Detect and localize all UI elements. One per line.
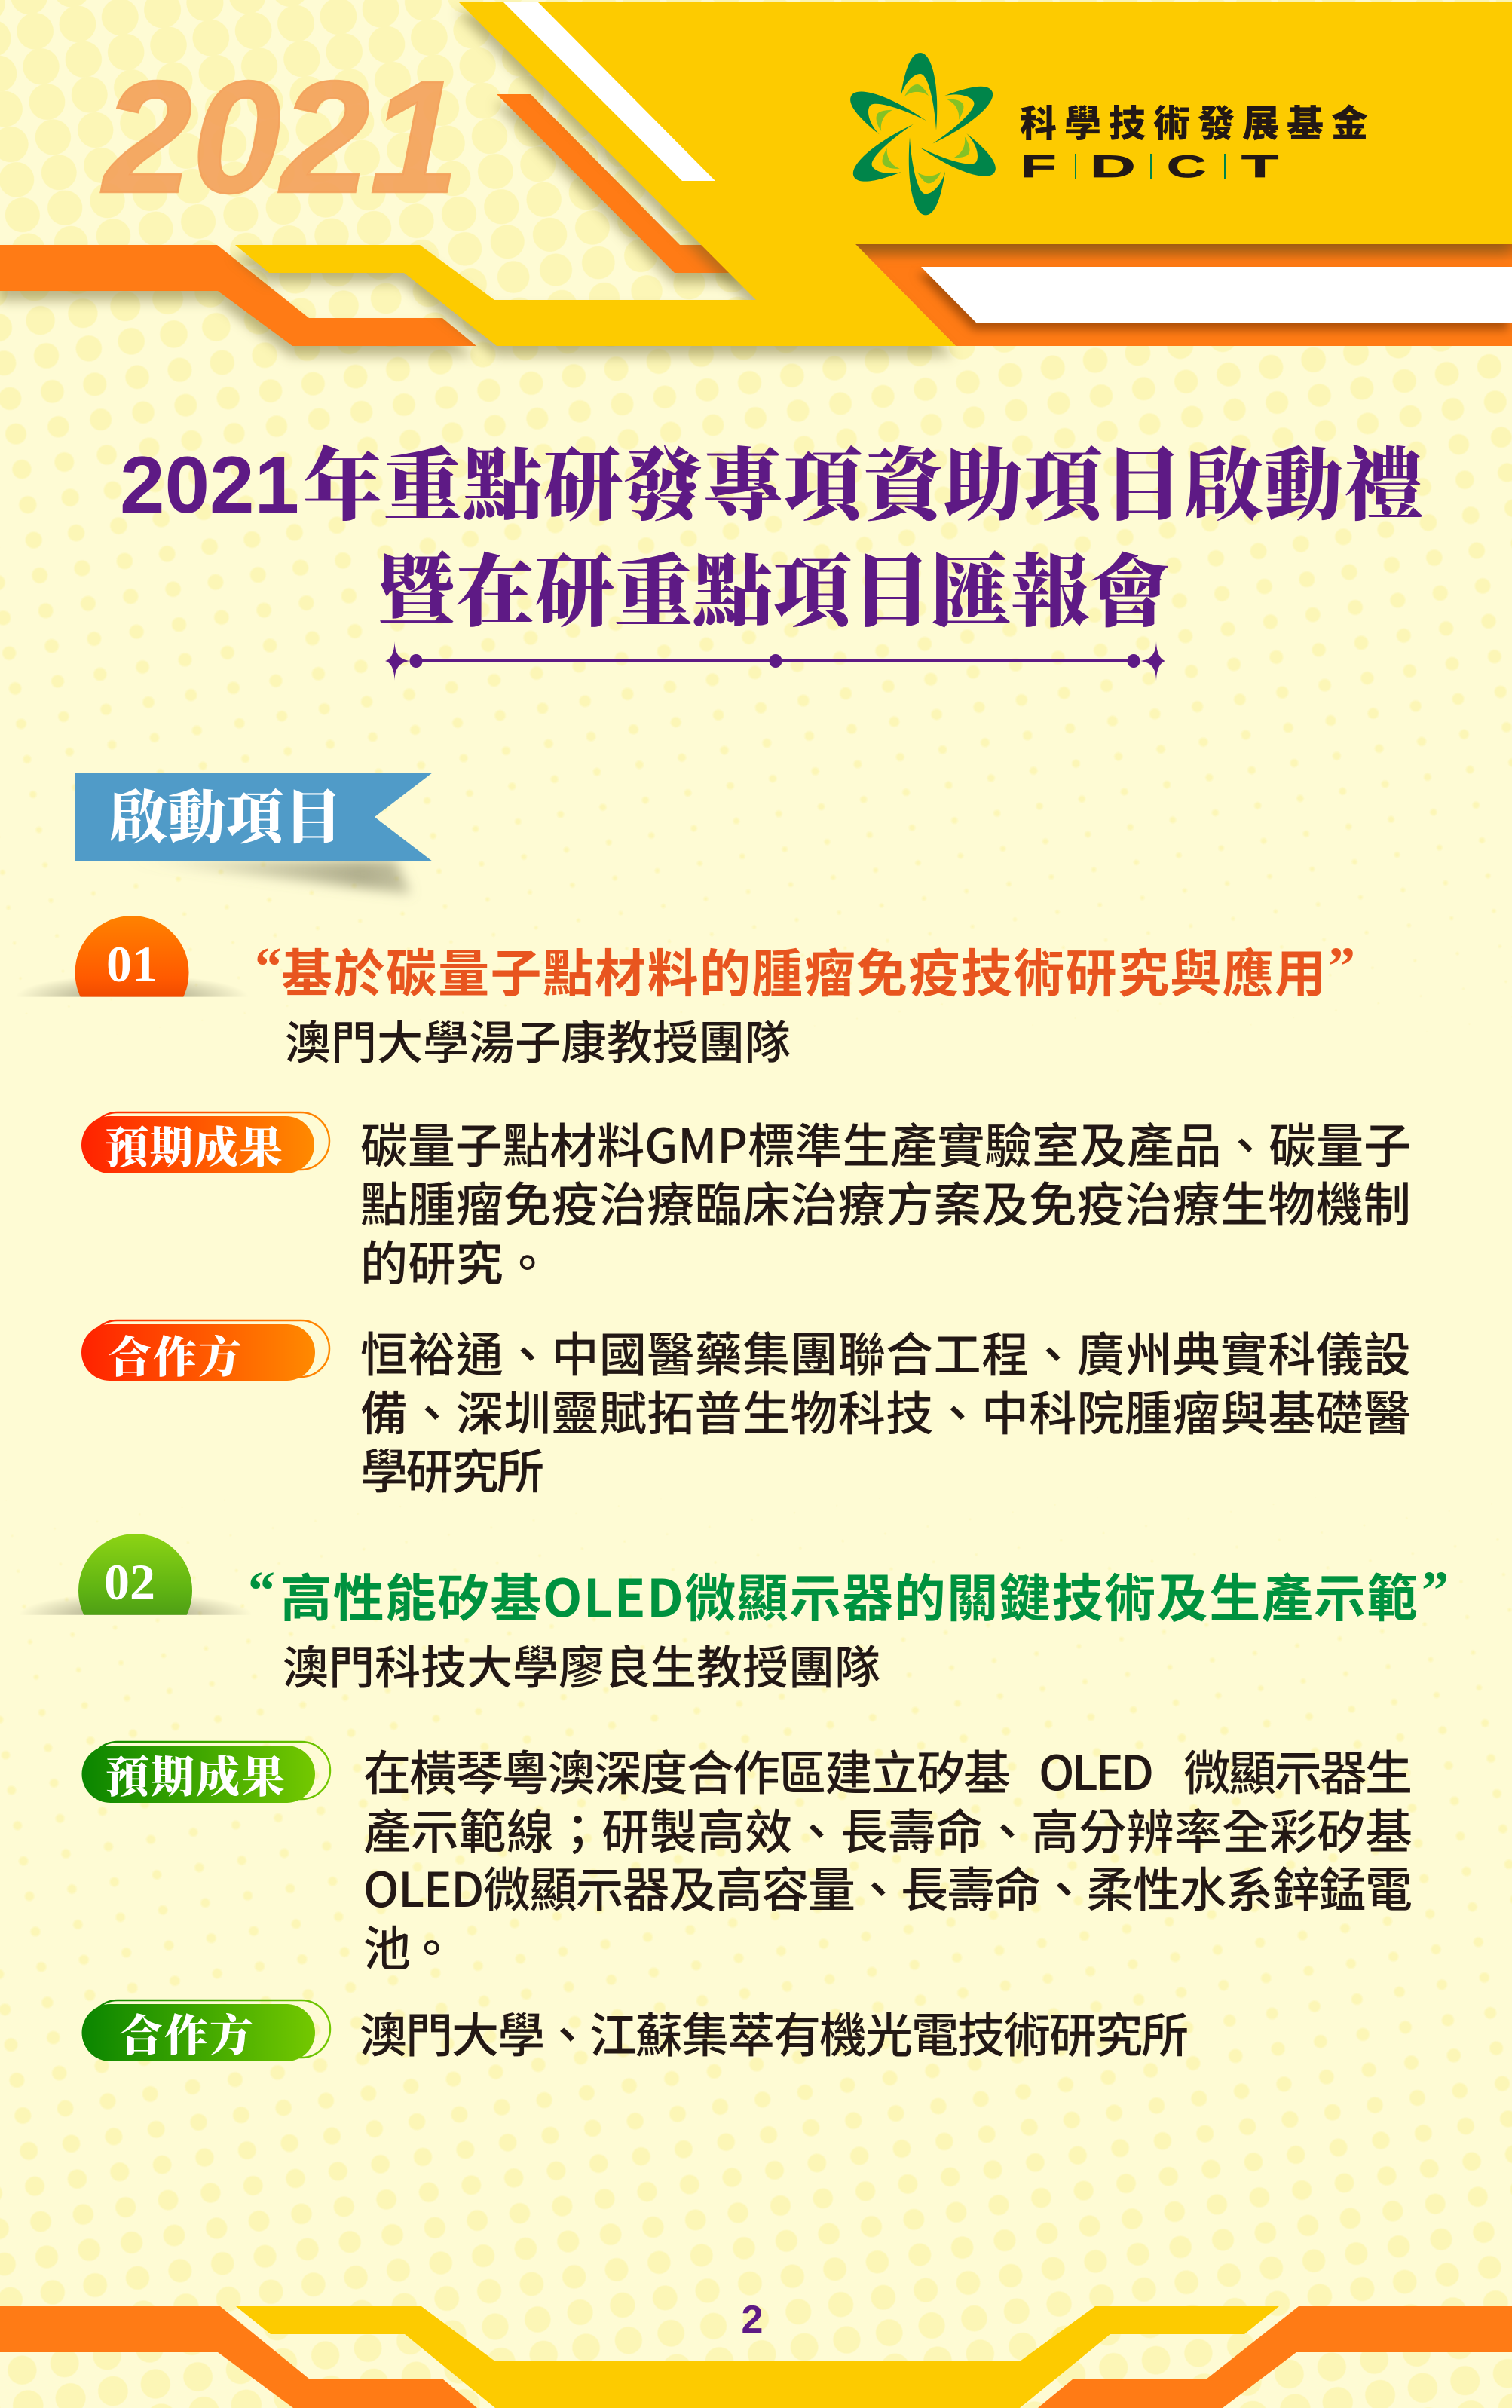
project 01 partners text: 備、深圳靈賦拓普生物科技、中科院腫瘤與基礎醫 <box>360 1376 1411 1445</box>
section ribbon <box>75 773 433 894</box>
white band <box>921 267 1512 323</box>
header banner <box>0 2 1512 346</box>
project 02 title: 高性能矽基OLED微顯示器的關鍵技術及生產示範 <box>280 1557 1418 1632</box>
pill: expected results 02: 預期成果 <box>106 1753 285 1802</box>
pill: partners 02: 合作方 <box>119 2012 253 2061</box>
logo latin letters <box>1021 148 1278 184</box>
ribbon shadow <box>121 860 411 894</box>
project 01 partners text: 恒裕通、中國醫藥集團聯合工程、廣州典實科儀設 <box>360 1317 1411 1386</box>
FDCT logo <box>841 53 1368 215</box>
pill: partners 02 <box>81 2000 330 2061</box>
logo latin letters: D <box>1090 149 1136 184</box>
pill: expected results 01 <box>81 1112 329 1173</box>
project 02 results text: 在橫琴粵澳深度合作區建立矽基 <box>363 1736 1011 1804</box>
project 02 title: ” <box>1422 1560 1449 1620</box>
project 02 results text: OLED微顯示器及高容量、長壽命、柔性水系鋅錳電 <box>363 1853 1413 1921</box>
title line 2: 暨在研重點項目匯報會 <box>376 549 1169 637</box>
pill: partners 01: 合作方 <box>108 1333 242 1382</box>
year 2021: 2021 <box>100 47 459 226</box>
project 01 title: 基於碳量子點材料的腫瘤免疫技術研究與應用 <box>281 932 1326 1007</box>
logo latin letters: C <box>1167 148 1206 184</box>
project 01 results text <box>360 1109 1411 1295</box>
project 02 results text: 產示範線；研製高效、長壽命、高分辨率全彩矽基 <box>363 1795 1413 1863</box>
pill: expected results 01: 預期成果 <box>105 1124 283 1173</box>
project 01 results text: 碳量子點材料GMP標準生產實驗室及產品、碳量子 <box>360 1109 1411 1177</box>
project 02 title: “ <box>248 1560 275 1620</box>
pill: partners 01 <box>81 1320 329 1382</box>
icon: six-petal flower <box>841 53 1005 215</box>
orange left band <box>0 245 476 346</box>
page number: 2 <box>742 2298 763 2342</box>
title divider <box>385 641 1165 681</box>
project 01 team: 澳門大學湯子康教授團隊 <box>285 1005 791 1072</box>
badge 01: 01 <box>106 935 158 993</box>
project 01 title: ” <box>1328 936 1355 996</box>
project 01 partners text <box>360 1317 1411 1503</box>
project 02 team: 澳門科技大學廖良生教授團隊 <box>283 1630 880 1697</box>
project 01 results text: 的研究。 <box>360 1226 551 1295</box>
orange right band <box>855 244 1512 346</box>
ribbon shape <box>75 773 433 861</box>
title line 1: 年重點研發專項資助項目啟動禮 <box>303 442 1423 531</box>
badge 01 <box>24 916 240 997</box>
yellow main shape <box>235 2 1512 346</box>
project 02 results text: OLED <box>1039 1736 1154 1804</box>
project 02 partners text: 澳門大學、江蘇集萃有機光電技術研究所 <box>360 1998 1189 2067</box>
main title <box>120 439 1423 637</box>
logo latin letters: F <box>1021 148 1056 184</box>
project 01 results text: 點腫瘤免疫治療臨床治療方案及免疫治療生物機制 <box>360 1167 1411 1236</box>
footer banner <box>0 2306 1512 2408</box>
logo latin letters: T <box>1241 148 1278 184</box>
project 02 results text: 微顯示器生 <box>1183 1736 1413 1804</box>
project 01 partners text: 學研究所 <box>360 1434 544 1503</box>
badge 02: 02 <box>104 1553 155 1611</box>
title line 1: 2021 <box>120 439 299 530</box>
project 02 results text <box>363 1736 1413 1980</box>
pill: expected results 02 <box>81 1742 330 1803</box>
logo chinese name: 科學技術發展基金 <box>1020 94 1368 148</box>
project 01 title: “ <box>255 936 282 996</box>
project 02 results text: 池。 <box>363 1911 455 1980</box>
orange diagonal stripe <box>497 94 746 273</box>
badge 02 <box>28 1534 243 1615</box>
ribbon heading: 啟動項目 <box>109 786 342 851</box>
white stripe <box>503 2 715 181</box>
